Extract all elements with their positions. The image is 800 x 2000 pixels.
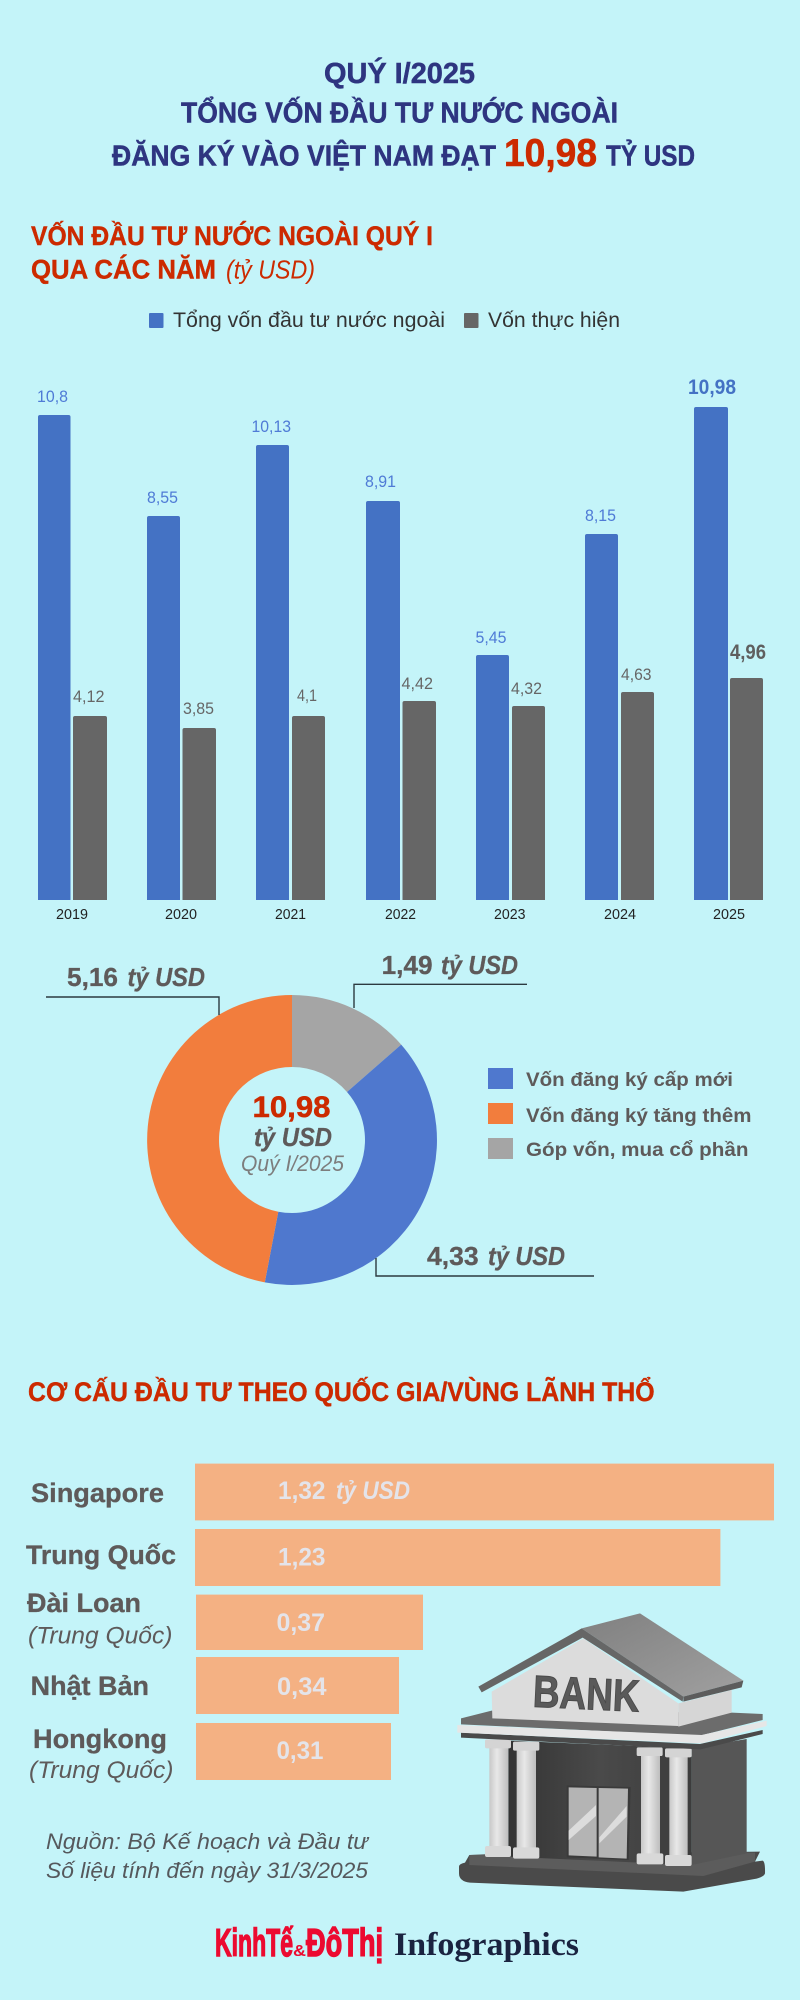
value labels: implemented capital: 4,1	[297, 686, 317, 705]
bank sign: BANK	[532, 1666, 641, 1722]
value labels: implemented capital: 4,42	[402, 674, 433, 693]
logo: &	[293, 1943, 306, 1960]
logo	[215, 1922, 579, 1965]
heading: structure by country: CƠ CẤU ĐẦU TƯ THEO QUỐC GIA/VÙNG LÃNH THỔ	[28, 1377, 655, 1407]
callout: 5,16: tỷ USD	[128, 962, 205, 992]
source note	[46, 1829, 370, 1883]
source note: Nguồn: Bộ Kế hoạch và Đầu tư	[46, 1829, 370, 1854]
value labels: total foreign capital: 10,98	[688, 376, 736, 399]
country value labels: 1,32	[278, 1477, 326, 1505]
source note: Số liệu tính đến ngày 31/3/2025	[46, 1858, 368, 1883]
title: TỶ USD	[606, 140, 695, 172]
year axis labels: 2024	[604, 907, 636, 923]
country name labels: Singapore	[31, 1478, 164, 1508]
icon: bank building	[457, 1613, 767, 1892]
year axis labels: 2025	[713, 907, 745, 923]
chart legend: Tổng vốn đầu tư nước ngoài	[173, 308, 445, 332]
country value labels: 0,34	[277, 1673, 327, 1701]
callout: 5,16: 5,16	[67, 962, 118, 992]
value labels: total foreign capital: 8,15	[585, 506, 616, 525]
donut legend: Vốn đăng ký tăng thêm	[526, 1105, 752, 1127]
country name labels: Hongkong	[33, 1724, 167, 1754]
heading: capital by year: (tỷ USD)	[226, 254, 315, 284]
value labels: implemented capital: 3,85	[183, 699, 214, 718]
country value labels: 1,23	[278, 1544, 326, 1572]
slice: capital contribution and share purchase	[292, 995, 401, 1092]
callout: 4,33: tỷ USD	[488, 1241, 565, 1271]
value labels: implemented capital	[73, 641, 766, 718]
country name labels: Nhật Bản	[31, 1671, 149, 1701]
donut centre text: 10,98	[252, 1091, 330, 1124]
country value labels: tỷ USD	[336, 1477, 410, 1505]
logo: KinhTế	[215, 1922, 293, 1965]
chart legend: Vốn thực hiện	[488, 308, 620, 332]
callout: 1,49	[354, 950, 527, 1008]
year axis labels: 2020	[165, 907, 197, 923]
country bars	[195, 1464, 774, 1780]
value labels: total foreign capital: 5,45	[476, 628, 506, 647]
year axis labels: 2022	[385, 907, 416, 923]
year axis labels: 2021	[275, 907, 306, 923]
donut legend: Vốn đăng ký cấp mới	[526, 1069, 733, 1091]
callout: 4,33: 4,33	[427, 1241, 479, 1271]
value labels: total foreign capital: 8,55	[147, 488, 178, 507]
donut legend	[488, 1068, 752, 1161]
callout: 4,33	[376, 1241, 594, 1276]
value labels: total foreign capital: 10,13	[252, 417, 291, 436]
donut centre text	[241, 1091, 345, 1176]
slice: additional registered capital	[147, 995, 292, 1282]
donut legend: Góp vốn, mua cổ phần	[526, 1139, 748, 1161]
callout: 1,49: tỷ USD	[441, 950, 518, 980]
country name labels: Trung Quốc	[26, 1540, 176, 1570]
title: TỔNG VỐN ĐẦU TƯ NƯỚC NGOÀI	[181, 96, 618, 130]
value labels: total foreign capital	[37, 376, 736, 647]
value labels: implemented capital: 4,96	[730, 641, 766, 664]
bar chart: by country	[26, 1464, 774, 1784]
country name labels	[26, 1478, 176, 1784]
chart legend	[149, 308, 620, 332]
title: 10,98	[504, 132, 597, 175]
title: ĐĂNG KÝ VÀO VIỆT NAM ĐẠT	[112, 140, 497, 172]
value labels: implemented capital: 4,32	[511, 679, 542, 698]
year axis labels: 2019	[56, 907, 88, 923]
title	[112, 58, 695, 175]
heading: capital by year: VỐN ĐẦU TƯ NƯỚC NGOÀI QUÝ I	[31, 221, 433, 251]
logo: ĐôThị	[306, 1922, 383, 1965]
bars: implemented capital	[73, 678, 763, 900]
country name labels: (Trung Quốc)	[29, 1757, 174, 1784]
country value labels: 0,31	[276, 1737, 324, 1765]
year axis labels	[56, 907, 745, 923]
title: QUÝ I/2025	[324, 58, 475, 90]
country value labels: 0,37	[276, 1609, 325, 1637]
callout: 5,16	[46, 962, 219, 1015]
country value labels	[276, 1477, 410, 1765]
slice: newly registered capital	[265, 1045, 437, 1285]
donut centre text: tỷ USD	[254, 1122, 332, 1152]
callout: 1,49: 1,49	[382, 950, 433, 980]
value labels: implemented capital: 4,12	[73, 687, 104, 706]
bar chart: capital by year	[37, 376, 766, 923]
bars: total foreign capital	[38, 407, 728, 900]
heading: capital by year	[31, 221, 433, 284]
donut centre text: Quý I/2025	[241, 1151, 345, 1176]
value labels: total foreign capital: 10,8	[37, 387, 68, 406]
value labels: total foreign capital: 8,91	[365, 472, 396, 491]
value labels: implemented capital: 4,63	[621, 665, 652, 684]
logo: Infographics	[394, 1927, 579, 1963]
donut chart	[147, 995, 437, 1285]
year axis labels: 2023	[494, 907, 526, 923]
country name labels: Đài Loan	[27, 1588, 141, 1618]
heading: capital by year: QUA CÁC NĂM	[31, 254, 216, 284]
country name labels: (Trung Quốc)	[28, 1622, 172, 1650]
